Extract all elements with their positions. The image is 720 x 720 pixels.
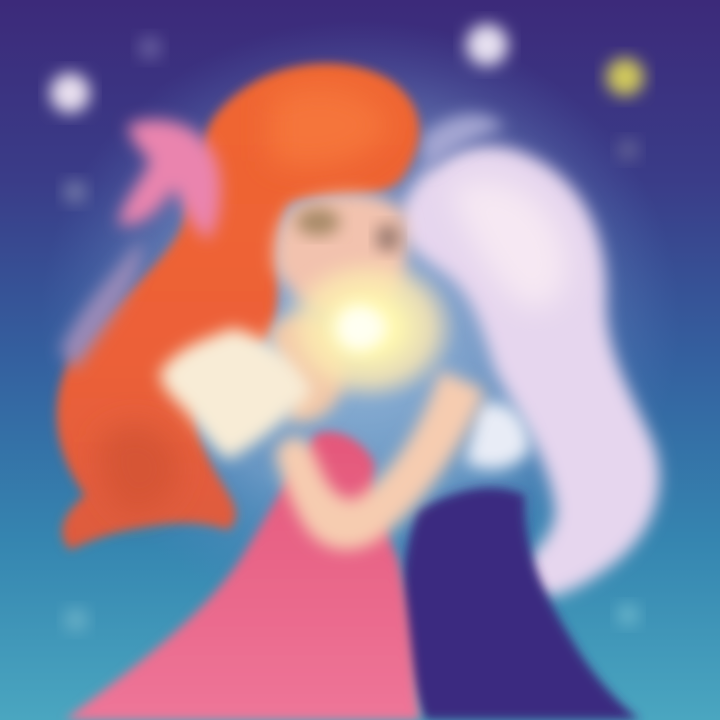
pink bow [118,120,221,240]
star: faint lower right [617,604,639,626]
orange hair [57,64,419,550]
star: faint top [138,36,162,60]
background: pale halo behind the figures [40,20,680,620]
star: faint lower left [64,608,88,632]
star: faint left [63,180,87,204]
character: red-haired girl [57,64,485,720]
eye [296,208,340,236]
pink hair strand shade [60,240,142,370]
stars [50,24,644,632]
neck and shoulder [268,316,346,422]
outer glow [278,253,458,403]
face [274,193,407,319]
white collar [465,402,530,469]
navy dress [402,488,640,720]
hair highlight [450,180,567,308]
eye of second girl [376,224,400,252]
lilac hair [398,146,659,597]
white puff sleeve [160,328,312,460]
arm [275,370,485,550]
pink dress [65,432,420,720]
star: faint right [617,139,639,161]
glowing light between the girls [278,253,458,403]
star: white upper right [466,24,508,66]
hair ribbon [420,114,505,172]
character: lilac-haired girl [398,114,659,720]
star: white upper left [50,73,90,113]
hair highlight [270,86,390,167]
star: yellow upper right [606,58,644,96]
dark hair strand [99,424,180,515]
bright core [336,306,380,350]
